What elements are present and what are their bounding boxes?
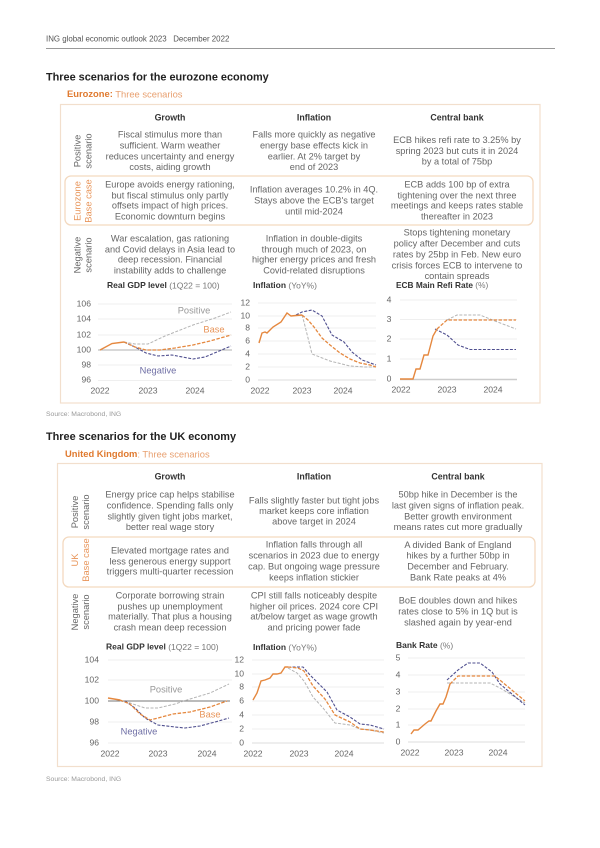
text: inflation positive: energy base effects kick in — [260, 140, 368, 150]
y axis labels — [77, 298, 91, 384]
label: negative: Negative — [140, 365, 176, 375]
row label: negative scenario: scenario — [81, 594, 91, 630]
text: central bank base: hikes by a further 50bp in — [406, 550, 510, 560]
text: growth negative: materially. That plus a housing — [108, 611, 232, 621]
y axis labels: 104 — [77, 313, 91, 323]
text: inflation positive: end of 2023 — [290, 162, 338, 172]
chart title: Inflation (YoY%) — [253, 280, 317, 290]
x axis labels — [400, 747, 508, 757]
text: central bank base — [391, 179, 523, 221]
line: negative — [125, 701, 229, 728]
column heading: central bank: Central bank — [430, 112, 484, 122]
y axis labels: 106 — [77, 298, 91, 308]
y axis labels: 0 — [239, 737, 244, 747]
y axis labels: 6 — [239, 695, 244, 705]
column heading: inflation: Inflation — [297, 471, 331, 481]
text: central bank positive: 50bp hike in December is the — [398, 489, 518, 499]
x axis labels: 2022 — [100, 748, 120, 758]
source: eurozone: Source: Macrobond, ING — [46, 411, 121, 418]
row label: eurozone base case: Base case — [83, 179, 93, 223]
y axis labels — [85, 654, 99, 747]
text: central bank base: thereafter in 2023 — [421, 211, 493, 221]
chart: UK inflation — [234, 642, 384, 758]
text: central bank base: Bank Rate peaks at 4% — [410, 572, 506, 582]
y axis labels: 10 — [240, 310, 250, 320]
text: growth base: Economic downturn begins — [115, 211, 226, 221]
y axis labels: 98 — [89, 716, 99, 726]
row label: negative scenario — [70, 594, 91, 630]
x axis labels — [250, 385, 353, 395]
x axis labels: 2023 — [444, 747, 464, 757]
text: inflation base: Stays above the ECB's target — [254, 195, 374, 205]
line: base forecast — [120, 700, 227, 720]
text: inflation base: Inflation falls through all — [266, 539, 362, 549]
chart title: Inflation (YoY%) — [253, 642, 317, 652]
text: growth positive — [106, 129, 235, 172]
chart: ECB main refi rate — [387, 280, 517, 394]
row label: eurozone base case — [72, 179, 93, 223]
y axis labels: 0 — [396, 736, 401, 746]
line: base actual — [411, 684, 450, 734]
y axis labels — [240, 297, 250, 384]
y axis labels: 1 — [396, 719, 401, 729]
page header: ING global economic outlook 2023 December 2022 — [46, 35, 229, 44]
text: inflation positive — [249, 495, 380, 526]
column heading: central bank: Central bank — [431, 471, 485, 481]
text: central bank base: meetings and keeps rates stable — [391, 200, 523, 210]
label: negative: Negative — [121, 726, 157, 736]
text: central bank base: tightening over the next three — [397, 190, 517, 200]
row label: positive scenario — [70, 494, 91, 530]
text: growth positive: slightly given tight jobs market, — [107, 511, 233, 521]
text: central bank base: A divided Bank of England — [404, 540, 512, 550]
text: growth base: Elevated mortgage rates and — [111, 545, 229, 555]
x axis labels: 2024 — [483, 384, 503, 394]
y axis labels: 5 — [396, 652, 401, 662]
text: growth negative — [105, 233, 235, 275]
y axis labels: 2 — [239, 723, 244, 733]
text: growth positive: better real wage story — [126, 522, 215, 532]
text: central bank negative: rates close to 5% in 1Q but is — [398, 606, 518, 616]
y axis labels: 4 — [387, 294, 392, 304]
text: central bank base: December and February. — [407, 561, 509, 571]
line: positive — [447, 315, 516, 329]
text: central bank positive: ECB hikes refi rate to 3.25% by — [393, 135, 521, 145]
text: inflation negative: Inflation in double-digits — [266, 233, 363, 243]
y axis labels: 1 — [387, 353, 392, 363]
label: positive: Positive — [178, 305, 210, 315]
text: growth negative: War escalation, gas rationing — [111, 233, 229, 243]
line: base actual — [400, 329, 437, 379]
text: growth base: offsets impact of high prices. — [112, 200, 228, 210]
text: inflation negative: CPI still falls noticeably despite — [251, 590, 377, 600]
row label: UK base case: UK — [70, 553, 80, 566]
line: positive — [447, 683, 525, 703]
x axis labels: 2024 — [197, 748, 217, 758]
x axis labels: 2022 — [400, 747, 420, 757]
row label: negative scenario: Negative — [70, 594, 80, 630]
text: inflation negative: through much of 2023, on — [262, 244, 366, 254]
label: positive: Positive — [150, 684, 182, 694]
y axis labels — [234, 654, 244, 747]
row label: negative scenario: Negative — [72, 237, 82, 273]
chart: UK real GDP level — [85, 642, 232, 758]
text: central bank negative: slashed again by year-end — [404, 617, 512, 627]
y axis labels: 8 — [239, 681, 244, 691]
text: inflation base: Inflation averages 10.2% in 4Q. — [250, 184, 378, 194]
x axis labels — [100, 748, 217, 758]
text: growth positive: reduces uncertainty and energy — [106, 151, 235, 161]
line: base forecast — [302, 315, 376, 367]
text: central bank positive: means rates cut more gradually — [394, 522, 523, 532]
row label: eurozone base case: Eurozone — [72, 181, 82, 221]
line: negative — [296, 310, 376, 365]
text: inflation base: scenarios in 2023 due to energy — [249, 550, 380, 560]
text: inflation positive: market keeps core inflation — [259, 506, 369, 516]
text: growth base: triggers multi-quarter recession — [107, 566, 233, 576]
x axis labels: 2022 — [243, 748, 263, 758]
text: inflation positive — [252, 129, 376, 172]
line: positive — [288, 668, 384, 733]
text: growth positive: costs, aiding growth — [129, 162, 211, 172]
x axis labels: 2023 — [292, 385, 312, 395]
x axis labels: 2022 — [250, 385, 270, 395]
y axis labels: 12 — [234, 654, 244, 664]
text: growth negative: and Covid delays in Asia lead to — [105, 244, 235, 254]
text: inflation negative: at/below target as wage growth — [250, 611, 378, 621]
column heading: growth: Growth — [155, 112, 185, 122]
text: inflation positive: above target in 2024 — [272, 516, 356, 526]
line: base actual — [100, 342, 124, 350]
x axis labels: 2024 — [334, 748, 354, 758]
y axis labels: 8 — [245, 322, 250, 332]
title: eurozone: Three scenarios for the eurozone economy — [46, 71, 269, 83]
y axis labels: 4 — [245, 348, 250, 358]
text: central bank base: ECB adds 100 bp of extra — [404, 179, 510, 189]
line: base actual — [108, 698, 120, 700]
y axis labels: 0 — [387, 373, 392, 383]
y axis labels: 3 — [387, 314, 392, 324]
text: growth base — [107, 545, 233, 576]
line: base forecast — [288, 667, 384, 732]
text: central bank negative: BoE doubles down and hikes — [399, 595, 518, 605]
y axis labels: 2 — [396, 703, 401, 713]
text: growth negative: deep recession. Financial — [118, 254, 222, 264]
y axis labels: 12 — [240, 297, 250, 307]
line: negative — [435, 329, 516, 350]
y axis labels: 100 — [85, 695, 99, 705]
x axis labels: 2023 — [148, 748, 168, 758]
x axis labels: 2024 — [488, 747, 508, 757]
text: inflation negative: higher oil prices. 2024 core CPI — [250, 601, 378, 611]
text: growth base — [105, 179, 235, 221]
text: inflation base — [250, 184, 378, 216]
text: growth negative — [108, 590, 232, 632]
text: inflation base: cap. But ongoing wage pressure — [248, 561, 380, 571]
row label: negative scenario: scenario — [83, 237, 93, 273]
label: base: Base — [199, 709, 221, 719]
x axis labels — [243, 748, 354, 758]
row label: positive scenario: Positive — [70, 496, 80, 528]
text: central bank negative — [392, 227, 522, 281]
text: inflation base: until mid-2024 — [285, 206, 343, 216]
text: growth positive: confidence. Spending falls only — [107, 500, 234, 510]
y axis labels: 96 — [81, 374, 91, 384]
x axis labels: 2024 — [185, 385, 205, 395]
line: base forecast — [450, 676, 525, 701]
source: UK: Source: Macrobond, ING — [46, 776, 121, 783]
chart title: Bank Rate (%) — [396, 640, 453, 650]
text: inflation positive: Falls slightly faster but tight jobs — [249, 495, 380, 505]
row label: positive scenario: scenario — [81, 494, 91, 530]
chart title: ECB Main Refi Rate (%) — [396, 280, 488, 290]
chart: eurozone inflation — [240, 280, 376, 395]
y axis labels: 96 — [89, 737, 99, 747]
text: central bank positive — [393, 135, 521, 166]
y axis labels: 0 — [245, 374, 250, 384]
x axis labels — [90, 385, 205, 395]
line: positive — [124, 312, 231, 344]
line: negative — [288, 667, 384, 729]
y axis labels: 10 — [234, 668, 244, 678]
text: inflation negative: and pricing power fade — [268, 622, 360, 632]
row label: positive scenario: scenario — [83, 133, 93, 169]
line: positive — [302, 315, 376, 367]
row label: UK base case — [70, 538, 91, 582]
line: base forecast — [124, 335, 231, 350]
text: growth negative: pushes up unemployment — [117, 601, 223, 611]
x axis labels: 2022 — [90, 385, 110, 395]
y axis labels: 6 — [245, 335, 250, 345]
chart: eurozone real GDP level — [77, 280, 232, 395]
x axis labels: 2023 — [437, 384, 457, 394]
y axis labels: 102 — [85, 674, 99, 684]
text: central bank positive: by a total of 75bp — [422, 156, 492, 166]
subtitle: eurozone: Eurozone: Three scenarios — [67, 88, 183, 99]
subtitle: UK: United Kingdom: Three scenarios — [65, 448, 210, 459]
text: growth positive: sufficient. Warm weather — [120, 140, 220, 150]
text: growth base: but fiscal stimulus only partly — [112, 190, 229, 200]
text: central bank negative: Stops tightening monetary — [404, 227, 511, 237]
base case highlight: UK — [63, 537, 535, 587]
y axis labels: 100 — [77, 344, 91, 354]
text: inflation positive: earlier. At 2% target by — [268, 151, 361, 161]
text: central bank positive: Better growth environment — [404, 511, 512, 521]
row label: UK base case: Base case — [81, 538, 91, 582]
text: central bank negative: policy after December and cuts — [394, 238, 521, 248]
chart title: Real GDP level (1Q22 = 100) — [106, 642, 219, 652]
x axis labels — [391, 384, 503, 394]
text: growth negative: crash mean deep recession — [114, 622, 226, 632]
y axis labels: 102 — [77, 329, 91, 339]
x axis labels: 2023 — [138, 385, 158, 395]
line: negative — [124, 342, 231, 359]
text: inflation negative: higher energy prices and fresh — [252, 254, 376, 264]
x axis labels: 2023 — [289, 748, 309, 758]
line: base actual — [259, 313, 302, 343]
text: growth base: less generous energy support — [109, 556, 231, 566]
text: central bank base — [404, 540, 512, 582]
text: inflation negative — [252, 233, 376, 275]
row label: positive scenario — [72, 133, 93, 169]
line: base forecast — [437, 320, 516, 329]
text: growth positive: Energy price cap helps stabilise — [105, 489, 235, 499]
x axis labels: 2022 — [391, 384, 411, 394]
line: base actual — [253, 667, 288, 700]
y axis labels: 2 — [387, 333, 392, 343]
text: growth positive — [105, 489, 235, 532]
y axis labels: 104 — [85, 654, 99, 664]
text: central bank negative: crisis forces ECB to intervene to — [392, 260, 522, 270]
text: central bank negative: contain spreads — [425, 271, 490, 281]
base case highlight: eurozone — [65, 176, 533, 225]
y axis labels — [396, 652, 401, 746]
text: central bank negative: rates by 25bp in Feb. New euro — [393, 249, 521, 259]
text: inflation base — [248, 539, 380, 582]
y axis labels: 3 — [396, 686, 401, 696]
column heading: growth: Growth — [155, 471, 185, 481]
label: base: Base — [203, 324, 225, 334]
row label: negative scenario — [72, 237, 93, 273]
text: growth negative: instability adds to challenge — [114, 265, 226, 275]
y axis labels: 2 — [245, 361, 250, 371]
text: growth base: Europe avoids energy rationing, — [105, 179, 235, 189]
panel: eurozone scenarios — [60, 104, 540, 403]
text: central bank negative — [398, 595, 518, 627]
line: negative — [447, 663, 525, 705]
text: central bank positive: last given signs of inflation peak. — [392, 500, 524, 510]
title: UK: Three scenarios for the UK economy — [46, 431, 236, 443]
row label: positive scenario: Positive — [72, 135, 82, 167]
text: inflation negative: Covid-related disruptions — [263, 265, 365, 275]
y axis labels: 4 — [396, 669, 401, 679]
text: inflation base: keeps inflation stickier — [269, 572, 359, 582]
text: growth negative: Corporate borrowing strain — [116, 590, 224, 600]
panel: UK scenarios — [58, 464, 542, 766]
text: central bank positive: spring 2023 but cuts it in 2024 — [396, 146, 518, 156]
column heading: inflation: Inflation — [297, 112, 331, 122]
text: inflation positive: Falls more quickly as negative — [252, 129, 376, 139]
line: positive — [120, 684, 229, 708]
chart: UK bank rate — [396, 640, 525, 757]
text: growth positive: Fiscal stimulus more than — [118, 129, 222, 139]
chart title: Real GDP level (1Q22 = 100) — [107, 280, 220, 290]
text: inflation negative — [250, 590, 378, 632]
y axis labels: 98 — [81, 359, 91, 369]
text: central bank positive — [392, 489, 524, 532]
y axis labels — [387, 294, 392, 383]
y axis labels: 4 — [239, 709, 244, 719]
x axis labels: 2024 — [333, 385, 353, 395]
